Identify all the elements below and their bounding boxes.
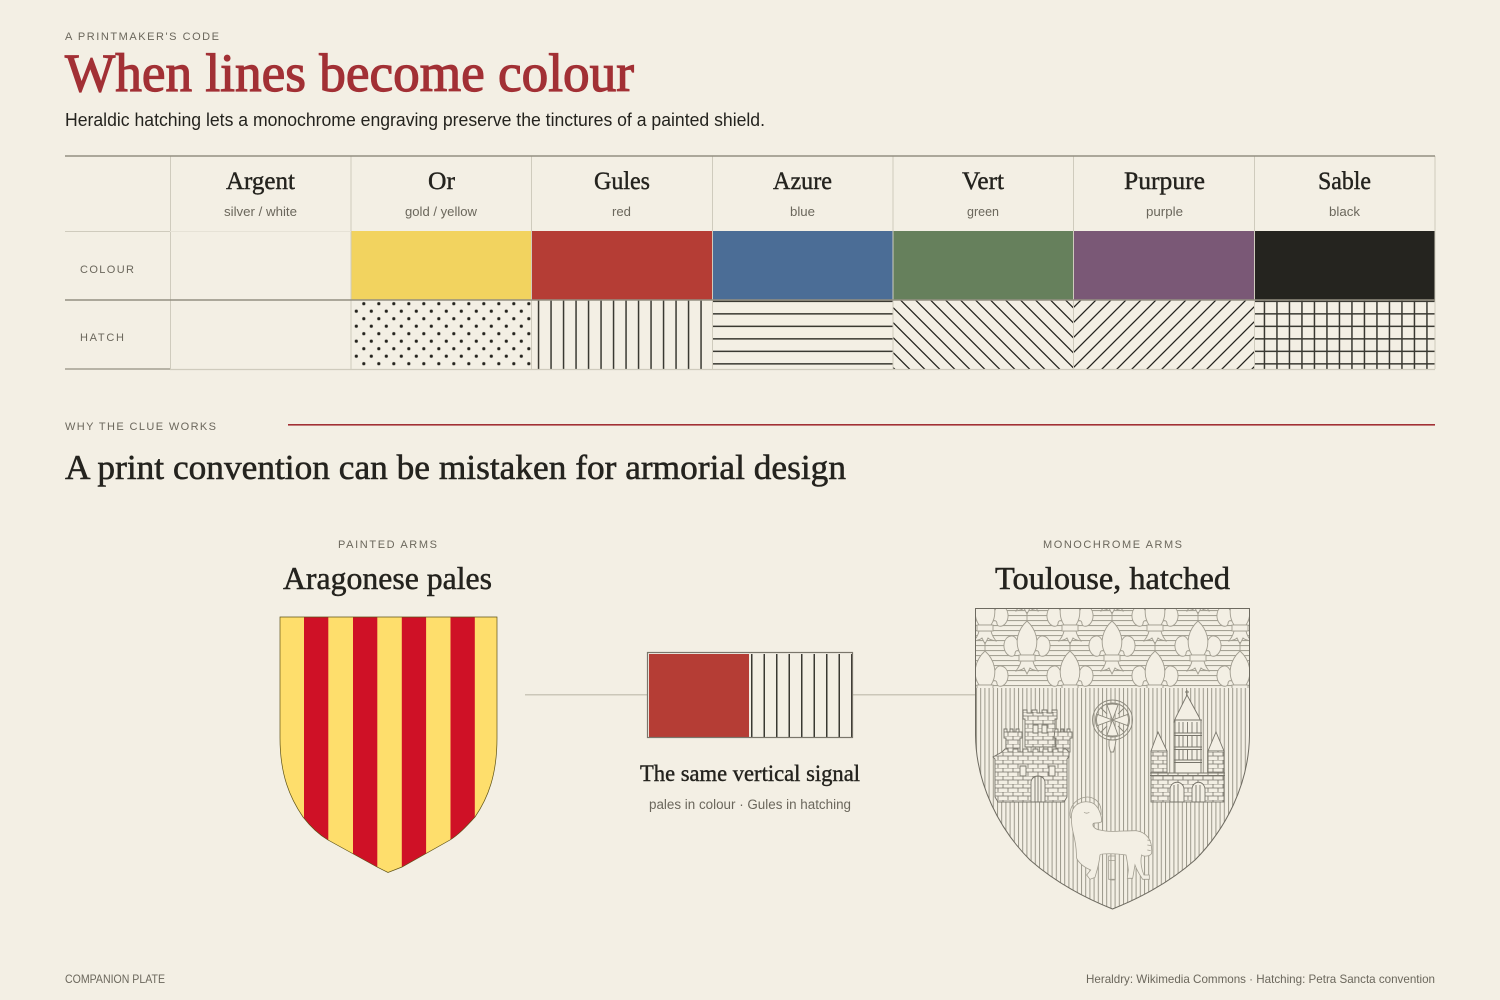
column: Purpure xyxy=(1124,168,1205,219)
connector: right xyxy=(853,694,975,696)
column: Purpure: purple xyxy=(1146,205,1183,219)
column: Vert: Vert xyxy=(962,168,1004,195)
connector: left xyxy=(525,694,647,696)
title: When lines become colour xyxy=(65,43,634,103)
eyebrow: A PRINTMAKER'S CODE xyxy=(65,31,219,43)
column: Vert: green xyxy=(967,205,999,219)
section rule xyxy=(288,424,1435,426)
column: Sable: Sable xyxy=(1318,168,1371,195)
subtitle: Heraldic hatching lets a monochrome engraving preserve the tinctures of a painted shield. xyxy=(65,110,765,130)
column: Sable xyxy=(1318,168,1371,219)
hatch swatches xyxy=(351,300,1435,369)
colour swatches xyxy=(351,231,1435,300)
shield: Aragon pales xyxy=(280,617,497,873)
church xyxy=(1150,690,1225,802)
column: Azure xyxy=(773,168,832,219)
column: Argent: silver / white xyxy=(224,205,297,219)
column: Purpure: Purpure xyxy=(1124,168,1205,195)
comparison swatch xyxy=(648,652,852,738)
column: Or xyxy=(405,168,478,219)
column: Or: Or xyxy=(428,168,456,195)
column: Azure: blue xyxy=(790,205,815,219)
panel: painted arms xyxy=(280,539,497,873)
label: PAINTED ARMS xyxy=(338,539,437,551)
column: Sable: black xyxy=(1329,205,1361,219)
panel: same signal xyxy=(640,652,860,812)
column: Argent: Argent xyxy=(226,168,295,195)
footer: left: COMPANION PLATE xyxy=(65,972,165,986)
caption heading: The same vertical signal xyxy=(640,761,860,786)
fleurs-de-lis xyxy=(976,609,1249,688)
column: Azure: Azure xyxy=(773,168,832,195)
row label: hatch: HATCH xyxy=(80,332,124,344)
ram xyxy=(1070,797,1152,880)
heading: Toulouse, hatched xyxy=(995,560,1230,596)
roundel: Toulouse cross xyxy=(1092,700,1132,752)
column: Or: gold / yellow xyxy=(405,205,478,219)
section heading: A print convention can be mistaken for armorial design xyxy=(65,448,846,487)
column: Vert xyxy=(962,168,1004,219)
column: Argent xyxy=(224,168,297,219)
label: MONOCHROME ARMS xyxy=(1043,539,1182,551)
panel: tincture table xyxy=(65,156,1435,370)
caption: pales in colour · Gules in hatching xyxy=(649,797,851,812)
footer: right: Heraldry: Wikimedia Commons · Hatching: Petra Sancta convention xyxy=(1086,972,1435,986)
heading: Aragonese pales xyxy=(283,560,492,596)
row label: colour: COLOUR xyxy=(80,264,134,276)
panel: monochrome arms xyxy=(962,539,1263,910)
column: Gules: Gules xyxy=(594,168,650,195)
column: Gules xyxy=(594,168,650,219)
shield: Toulouse hatched xyxy=(975,608,1250,910)
section eyebrow: WHY THE CLUE WORKS xyxy=(65,421,216,433)
castle xyxy=(993,710,1072,802)
column: Gules: red xyxy=(612,205,631,219)
